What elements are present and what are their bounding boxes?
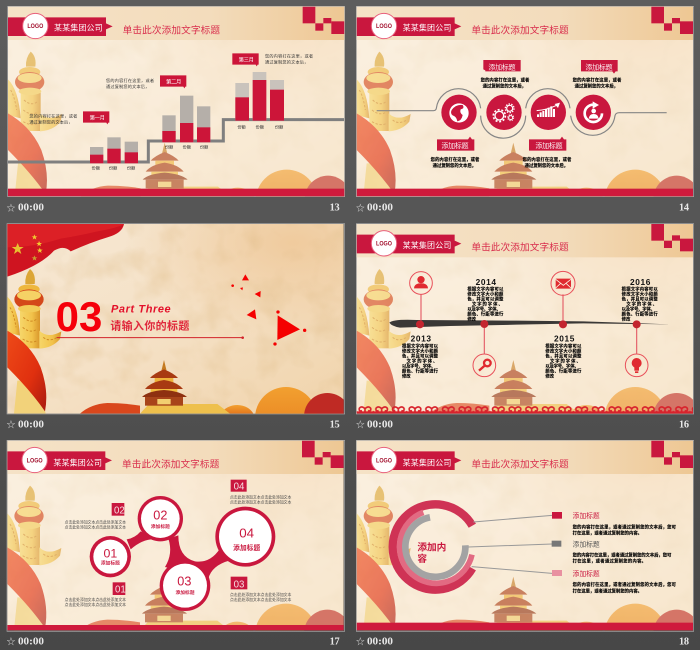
- year 2015 and text: 以及字号、字体、: [545, 362, 579, 369]
- panel: slide 14 circle process: 单击此次添加文字标题: [471, 24, 569, 36]
- bar chart: month one: [90, 137, 138, 170]
- heading: 请输入你的标题: [110, 318, 189, 332]
- text: item 02: 点击此处添加文本点击此处添加文本: [65, 524, 126, 529]
- bar chart: month three: [235, 72, 284, 129]
- year 2014 and text: 文字的字体、: [472, 301, 503, 308]
- icon: refresh person: [576, 95, 611, 130]
- text: month three: [265, 52, 313, 64]
- legend item 1: 打在这里，或者通过复制您的内容。: [573, 529, 642, 536]
- year 2014 and text: 修改: [467, 316, 477, 323]
- footer: slide 15: [7, 420, 340, 431]
- legend item 2: [573, 540, 672, 564]
- text: month one: [29, 112, 77, 124]
- footer: slide 17: 17: [330, 637, 340, 648]
- icon: person: [410, 272, 432, 294]
- year 2015 and text: 色，并且可以调整: [545, 352, 582, 359]
- text: bottom right: 通过复制您的文本后，: [525, 162, 568, 169]
- year 2014 and text: [467, 277, 504, 323]
- footer: slide 17: 00:00: [18, 637, 44, 648]
- panel: slide 17 connected circles: 单击此次添加文字标题: [122, 458, 220, 470]
- tag: month three: 第三月: [239, 55, 254, 63]
- bar chart: month two: 份额: [165, 144, 174, 150]
- text: item 01: 点击此处添加文本点击此处添加文本: [65, 597, 126, 602]
- panel: slide 18 ring chart: LOGO: [376, 458, 392, 465]
- circle 02 label: 02: [153, 508, 167, 522]
- legend item 1: 您的内容打在这里，或者通过复制您的文本后，您可: [573, 524, 677, 531]
- text: bottom right: [523, 156, 572, 169]
- legend item 3: [573, 569, 677, 594]
- circle 03 label: 添加标题: [175, 589, 195, 596]
- leader lines: [468, 515, 552, 573]
- underline with dot: [57, 336, 244, 339]
- circle 03 label: 03: [177, 575, 191, 589]
- footer: slide 17: [7, 637, 340, 648]
- text: top left: [481, 77, 530, 90]
- footer: slide 15: 15: [330, 420, 340, 431]
- text: top left: 通过复制您的文本后，: [483, 83, 526, 90]
- text: item 02: [65, 519, 126, 529]
- footer: slide 13: [7, 203, 340, 214]
- tag 04: [231, 480, 247, 493]
- panel: slide 15 section divider: [6, 223, 345, 428]
- text: month two: 您的内容打在这里，或者: [106, 77, 154, 83]
- footer: slide 15: 00:00: [18, 420, 44, 431]
- bar chart: month three: 份额: [256, 123, 265, 129]
- legend marker: gray: [552, 541, 561, 547]
- footer: slide 13: 00:00: [18, 203, 44, 214]
- legend item 1: [573, 511, 677, 536]
- tag: bottom right: [529, 137, 566, 151]
- year 2015 and text: 修改文字大小和颜: [545, 347, 582, 354]
- icon: globe: [441, 95, 477, 130]
- tag 02: 02: [114, 505, 125, 516]
- bar chart: month two: 份额: [183, 144, 192, 150]
- decorative triangles: [231, 274, 306, 346]
- text: item 03: 点击此处添加文本点击此处添加文本: [230, 592, 292, 597]
- panel: slide 17 connected circles: 某某集团公司: [53, 457, 102, 467]
- year 2013 and text: 颜色、行距等进行: [402, 367, 439, 374]
- ring label: 添加内: [417, 542, 446, 554]
- year 2013 and text: 修改文字大小和颜: [402, 347, 439, 354]
- text: top right: 您的内容打在这里，或者: [573, 77, 622, 84]
- footer: slide 16: 00:00: [367, 420, 393, 431]
- panel: slide 14 circle process: 某某集团公司: [403, 23, 451, 33]
- bar chart: month two: [162, 96, 210, 150]
- year 2014 and text: 修改文字大小和颜: [467, 291, 504, 298]
- text: item 04: 点击此处添加文本点击此处添加文本: [230, 494, 292, 499]
- footer: slide 17: ☆: [7, 637, 16, 647]
- panel: slide 18 ring chart: [356, 440, 700, 650]
- year 2013 and text: 2013: [411, 333, 431, 343]
- panel: slide 18 ring chart: 单击此次添加文字标题: [471, 458, 569, 470]
- year 2013 and text: 以及字号、字体、: [402, 362, 435, 369]
- year 2016 and text: 文字的字体、: [626, 301, 657, 308]
- timeline stems and nodes: [416, 294, 641, 354]
- tag: top left: 添加标题: [488, 62, 516, 71]
- ring chart: [393, 504, 472, 590]
- panel: slide 16 timeline: 某某集团公司: [403, 240, 451, 250]
- footer: slide 16: [356, 420, 689, 431]
- footer: slide 18: ☆: [356, 637, 365, 647]
- year 2016 and text: [622, 277, 658, 323]
- footer: slide 13: ☆: [7, 203, 16, 213]
- text: item 01: 点击此处添加文本点击此处添加文本: [65, 602, 126, 607]
- panel: slide 14 circle process: [356, 6, 694, 212]
- year 2014 and text: 以及字号、字体、: [467, 306, 501, 313]
- text: month one: 您的内容打在这里，或者: [29, 112, 77, 118]
- year 2016 and text: 修改: [622, 316, 631, 323]
- legend marker: red: [552, 512, 562, 519]
- year 2013 and text: 根据文字内容可以: [402, 342, 439, 349]
- year 2014 and text: 2014: [476, 277, 496, 287]
- text: bottom right: 您的内容打在这里，或者: [523, 156, 572, 163]
- year 2014 and text: 颜色、行距等进行: [467, 311, 504, 318]
- panel: slide 17 connected circles: [7, 440, 351, 650]
- step line: [8, 120, 344, 162]
- tag 03: [231, 577, 247, 590]
- panel: slide 16 timeline: LOGO: [376, 240, 392, 247]
- year 2013 and text: 色，并且可以调整: [402, 352, 439, 359]
- footer: slide 13: 13: [330, 203, 340, 214]
- tag 01: 01: [115, 585, 126, 596]
- tag 03: 03: [234, 579, 244, 590]
- tag: bottom left: 添加标题: [441, 141, 469, 150]
- year 2013 and text: 文字的字体、: [407, 357, 437, 364]
- text: item 02: 点击此处添加文本点击此处添加文本: [65, 519, 126, 524]
- year 2015 and text: 文字的字体、: [550, 357, 581, 364]
- tag: month two: [160, 75, 186, 88]
- year 2015 and text: 颜色、行距等进行: [545, 367, 582, 374]
- footer: slide 14: 14: [679, 203, 689, 214]
- text: month three: 通过复制您的文本后，: [265, 58, 308, 64]
- tag 02: [112, 503, 125, 516]
- year 2015 and text: [545, 333, 582, 379]
- circle 04 label: [233, 525, 261, 552]
- tag: bottom left: [437, 137, 474, 151]
- text: month two: 通过复制您的文本后，: [106, 83, 149, 89]
- panel: slide 13 step bar chart: LOGO: [27, 23, 43, 30]
- circle 01 label: 01: [103, 546, 117, 560]
- text: month three: 您的内容打在这里，或者: [265, 52, 313, 58]
- bar chart: month three: 份额: [237, 123, 246, 129]
- icon: rising bars: [531, 95, 566, 130]
- ring label: [417, 542, 446, 565]
- year 2013 and text: 修改: [402, 372, 411, 379]
- tag: top right: [581, 60, 618, 74]
- circle 02 label: 添加标题: [151, 523, 170, 530]
- text: top right: [573, 77, 622, 90]
- circle 02 label: [151, 508, 170, 530]
- year 2015 and text: 修改: [545, 372, 555, 379]
- text: month one: 通过复制您的文本后，: [29, 118, 73, 124]
- icon: light bulb: [625, 354, 648, 377]
- panel: slide 16 timeline: [356, 223, 694, 428]
- legend item 1: 添加标题: [573, 511, 600, 520]
- year 2016 and text: 色，并且可以调整: [622, 296, 658, 303]
- number 03: 03: [56, 293, 102, 340]
- panel: slide 17 connected circles: LOGO: [27, 458, 43, 465]
- icon: envelope: [551, 271, 575, 295]
- icon: gears: [486, 95, 522, 130]
- year 2015 and text: 2015: [554, 333, 575, 343]
- bar chart: month two: 份额: [200, 144, 209, 150]
- text: month two: [106, 77, 154, 89]
- text: item 04: [230, 494, 292, 504]
- bar chart: month one: 份额: [109, 164, 118, 170]
- text: bottom left: 通过复制您的文本后，: [433, 162, 476, 169]
- circle 04 label: 04: [239, 525, 255, 540]
- tag 04: 04: [234, 482, 245, 493]
- footer: slide 14: 00:00: [367, 203, 393, 214]
- text: item 03: 点击此处添加文本点击此处添加文本: [230, 597, 292, 602]
- text: top left: 您的内容打在这里，或者: [481, 77, 530, 84]
- subtitle: Part Three: Part Three: [111, 304, 171, 316]
- footer: slide 18: 00:00: [367, 637, 393, 648]
- tag: month one: [83, 111, 109, 124]
- ring label: 容: [417, 553, 427, 565]
- text: item 03: [230, 592, 292, 602]
- year 2016 and text: 2016: [630, 277, 651, 287]
- panel: slide 13 step bar chart: 单击此次添加文字标题: [123, 24, 220, 36]
- footer: slide 15: ☆: [7, 420, 16, 430]
- year 2014 and text: 色，并且可以调整: [467, 296, 504, 303]
- footer: slide 16: 16: [679, 420, 689, 431]
- brush stroke line: [389, 320, 670, 328]
- year 2016 and text: 以及字号、字体、: [622, 306, 655, 313]
- icon: key: [473, 354, 496, 377]
- circle 01 label: 添加标题: [101, 560, 120, 567]
- bottom scroll border: [356, 406, 693, 414]
- tag: month three: [232, 53, 259, 66]
- footer: slide 16: ☆: [356, 420, 365, 430]
- year 2016 and text: 根据文字内容可以: [622, 286, 658, 293]
- footer: slide 18: [356, 637, 689, 648]
- panel: slide 14 circle process: LOGO: [376, 23, 392, 30]
- icon: flag: [7, 224, 124, 277]
- text: top right: 通过复制您的文本后，: [575, 83, 618, 90]
- year 2013 and text: [402, 333, 439, 379]
- text: bottom left: [431, 156, 480, 169]
- legend marker: pink: [552, 570, 562, 576]
- connected circle network: [90, 496, 275, 611]
- legend item 3: 添加标题: [573, 569, 600, 578]
- panel: slide 13 step bar chart: 某某集团公司: [54, 23, 103, 33]
- legend item 3: 打在这里，或者通过复制您的内容。: [573, 587, 642, 594]
- tag: bottom right: 添加标题: [535, 141, 563, 150]
- legend item 2: 打在这里，或者通过复制您的内容。: [573, 557, 646, 564]
- legend item 2: 添加标题: [573, 540, 600, 549]
- legend item 3: 您的内容打在这里，或者通过复制您的文本后，您可: [573, 581, 677, 588]
- bar chart: month three: 份额: [275, 123, 284, 129]
- footer: slide 18: 18: [679, 637, 689, 648]
- text: item 01: [65, 597, 126, 607]
- circle 04 label: 添加标题: [233, 543, 261, 552]
- year 2015 and text: 根据文字内容可以: [545, 342, 582, 349]
- legend item 2: 您的内容打在这里，或者通过复制您的文本后，您可: [573, 552, 672, 559]
- tag: month two: 第二月: [166, 78, 181, 86]
- panel: slide 16 timeline: 单击此次添加文字标题: [471, 242, 569, 254]
- tag 01: [113, 582, 126, 596]
- panel: slide 18 ring chart: 某某集团公司: [403, 457, 451, 467]
- connector arcs: [377, 89, 667, 138]
- footer: slide 14: ☆: [356, 203, 365, 213]
- tag: top right: 添加标题: [585, 62, 613, 71]
- panel: slide 13 step bar chart: [7, 6, 345, 212]
- year 2016 and text: 颜色、行距等进行: [622, 311, 658, 318]
- text: bottom left: 您的内容打在这里，或者: [431, 156, 480, 163]
- bar chart: month one: 份额: [92, 164, 101, 170]
- year 2016 and text: 修改文字大小和颜: [622, 291, 658, 298]
- bar chart: month one: 份额: [127, 164, 136, 170]
- tag: month one: 第一月: [90, 113, 105, 121]
- footer: slide 14: [356, 203, 689, 214]
- circle 03 label: [175, 575, 195, 596]
- text: item 04: 点击此处添加文本点击此处添加文本: [230, 499, 292, 504]
- tag: top left: [483, 60, 521, 71]
- year 2014 and text: 根据文字内容可以: [467, 286, 504, 293]
- circle 01 label: [101, 546, 120, 567]
